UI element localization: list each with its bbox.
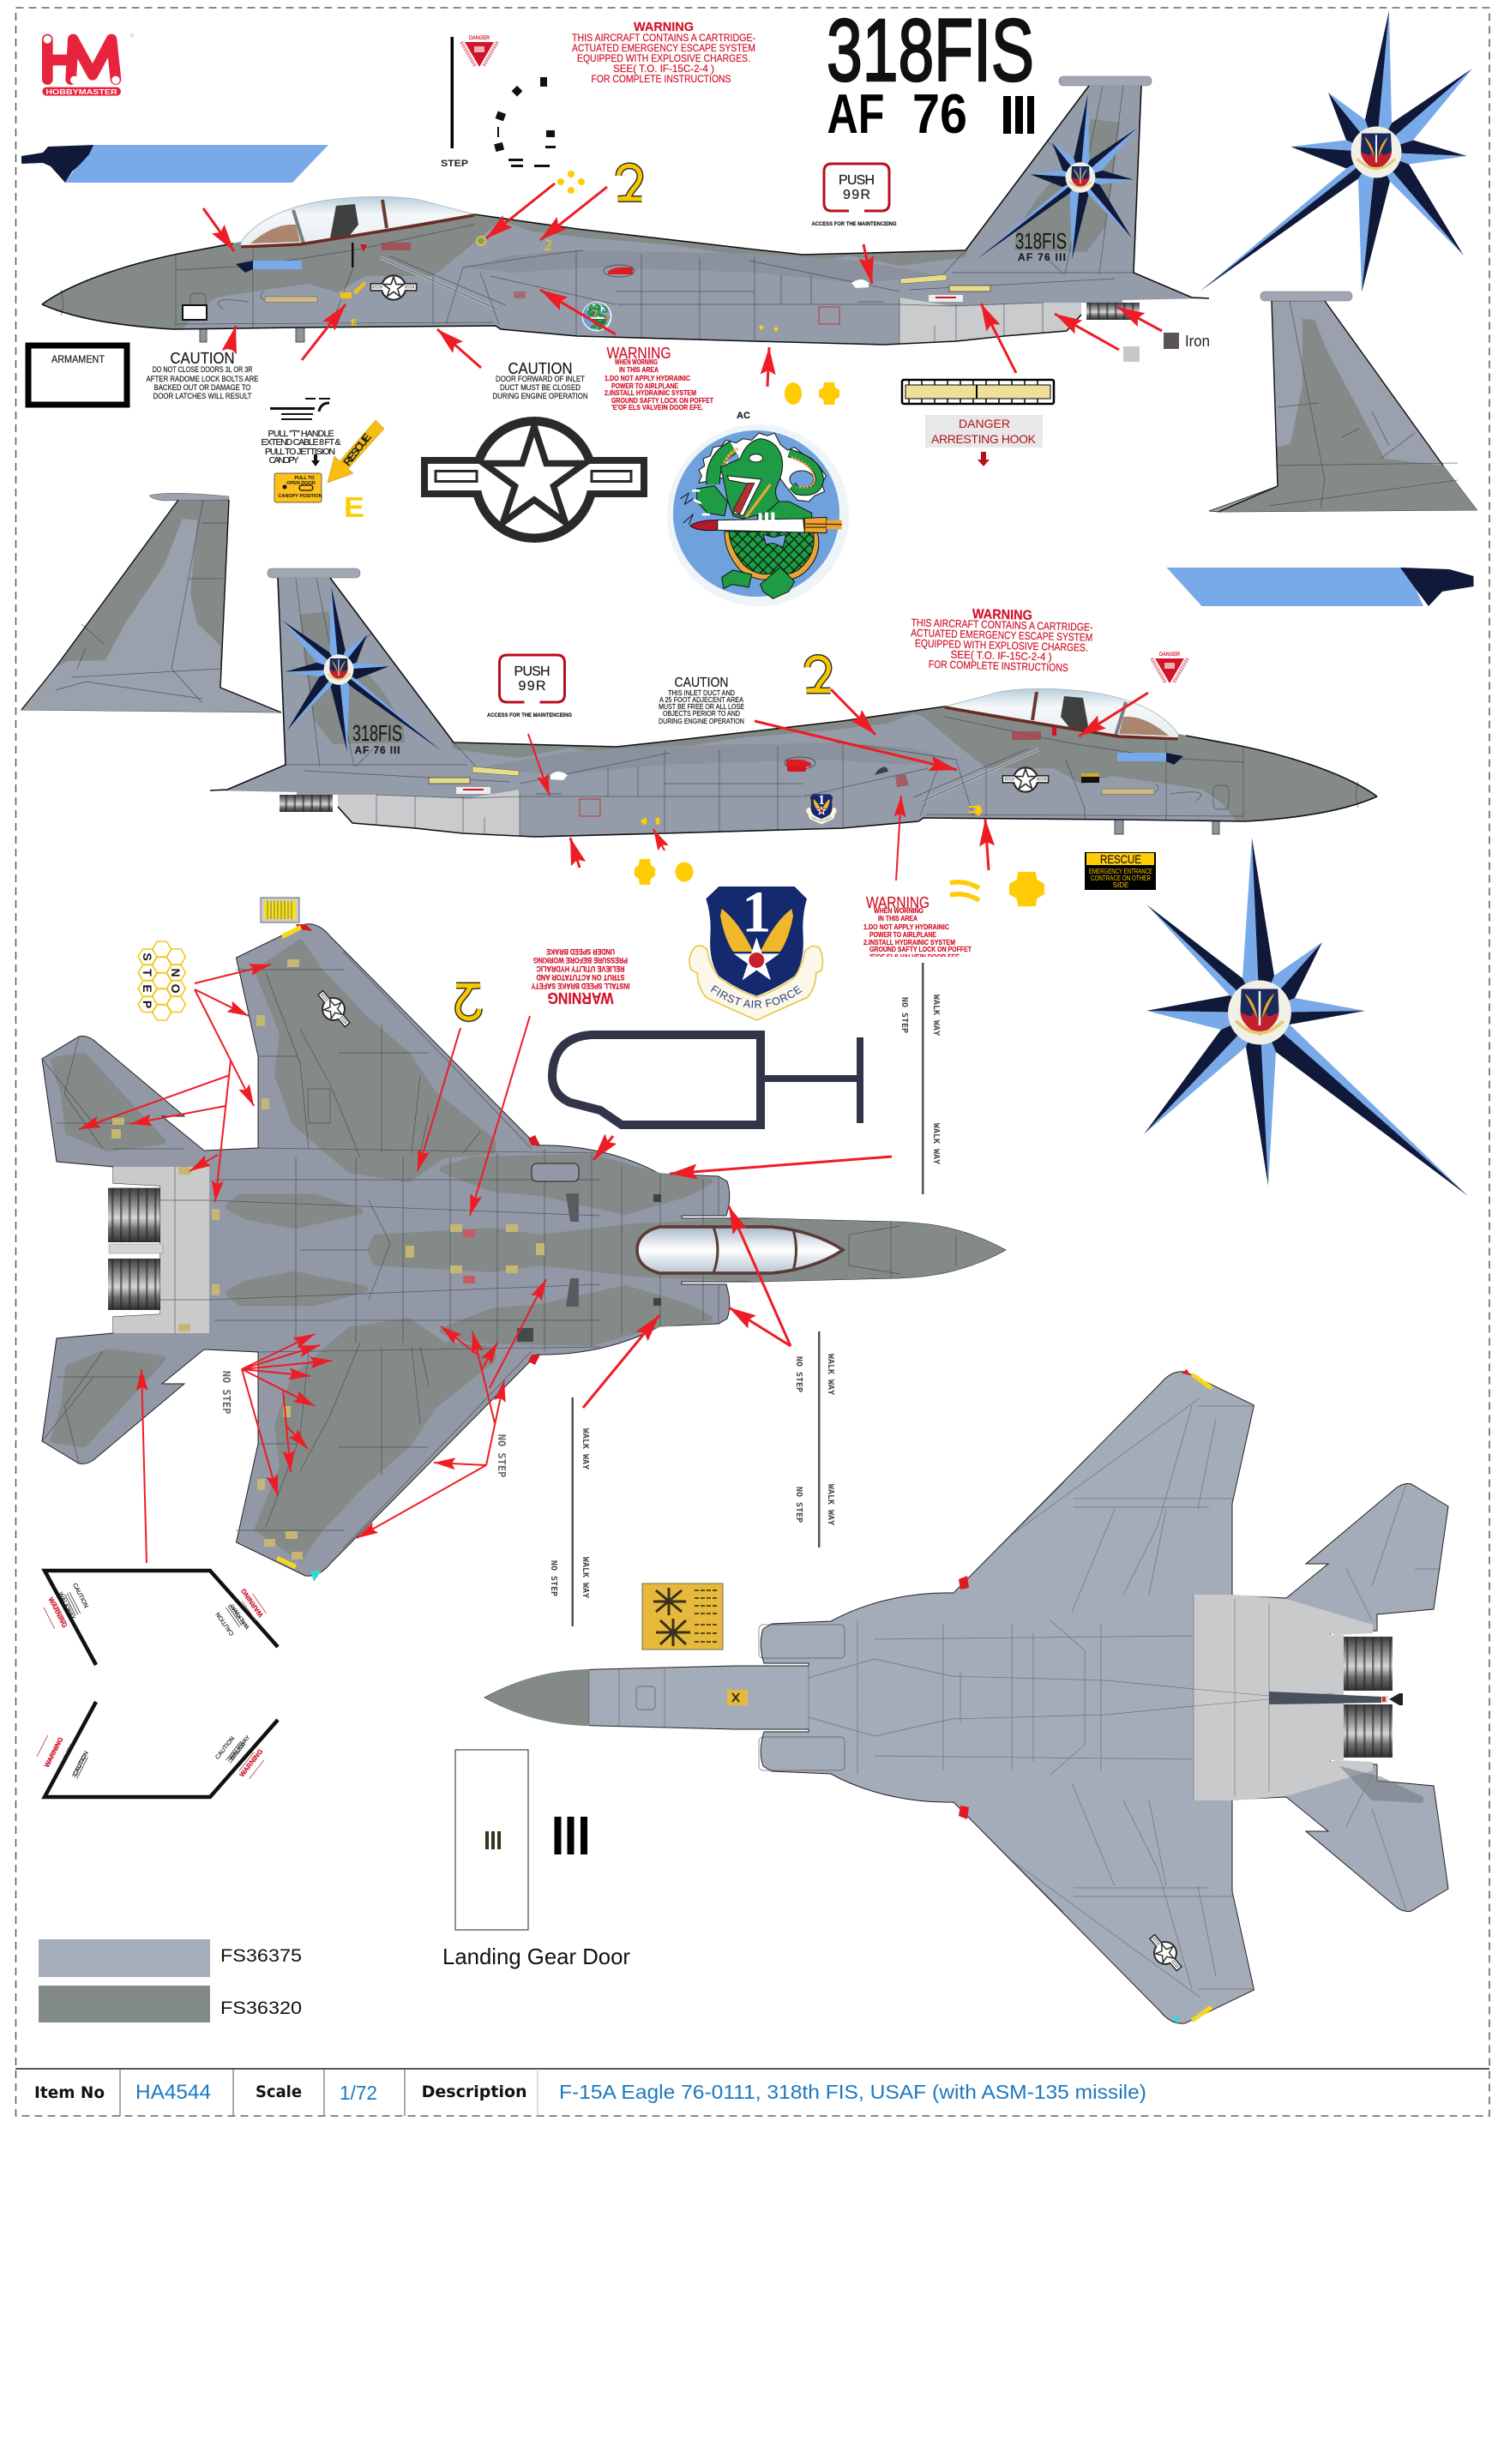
paint chips iron and light grey	[1123, 333, 1210, 362]
upper side view aircraft	[34, 76, 1209, 345]
warning text hydraulic 1: GROUND SAFTY LOCK ON POFFET	[611, 396, 714, 405]
danger arresting hook placard: ARRESTING HOOK	[931, 432, 1037, 446]
warning text hydraulic 2: 'E'OF ELS VALVEIN DOOR EFE.	[869, 953, 961, 961]
yellow rescue arrow: RESCUE	[340, 430, 374, 468]
walkway markings: WALK WAY	[826, 1484, 835, 1525]
armament box: ARMAMENT	[51, 353, 105, 365]
warning text hydraulic 2: POWER TO AIRLPLANE	[869, 930, 936, 939]
fuselage stripe decal right	[1166, 568, 1473, 606]
walkway markings: WALK WAY	[826, 1354, 835, 1395]
caution text door: DURING ENGINE OPERATION	[492, 392, 588, 401]
yellow canopy door placard: OPEN DOOR	[286, 481, 316, 486]
logo: Hobby Master	[42, 33, 135, 96]
walkway markings	[220, 963, 941, 1626]
caution inlet duct: A 25 FOOT ADJECENT AREA	[659, 695, 743, 704]
squadron dragon badge: AC	[737, 411, 750, 421]
tail number AF 76 III: AF	[827, 82, 885, 145]
caution inlet duct	[659, 676, 744, 725]
upside-down warning speed brake	[532, 947, 629, 1007]
aircraft 1 decals: 318FIS	[1015, 228, 1067, 254]
aircraft 2 decals: 318FIS	[352, 720, 402, 746]
walkway markings: NO STEP	[496, 1434, 508, 1477]
warning text hydraulic 1: 'E'OF ELS VALVEIN DOOR EFE.	[611, 403, 703, 412]
aircraft 2 decals: AF 76 III	[355, 744, 400, 756]
description: Description	[422, 2082, 527, 2101]
rescue black placard: SIDE	[1113, 881, 1128, 889]
rescue black placard	[1085, 852, 1156, 890]
black frame walkway decal upper: WALKWAY	[57, 1591, 75, 1621]
logo: Hobby Master: R	[130, 33, 135, 39]
tail number AF 76 III: 76	[912, 82, 967, 145]
walkway markings: WALK WAY	[581, 1557, 590, 1598]
black frame walkway decal upper: WARNING	[239, 1587, 265, 1619]
warning text: escape system	[572, 20, 755, 85]
yellow vent decal	[261, 898, 299, 922]
yellow canopy door placard: PULL TO	[294, 476, 315, 481]
yellow rescue arrow	[328, 420, 384, 483]
standalone fin left	[21, 493, 281, 712]
danger arresting hook placard	[925, 415, 1043, 466]
black frame walkway decal upper: CAUTION	[215, 1611, 236, 1637]
honeycomb no step decal	[138, 941, 185, 1020]
colour swatch FS36375	[39, 1939, 302, 1977]
warning text hydraulic 2	[857, 894, 972, 962]
aircraft 1 decals	[183, 228, 1067, 331]
yellow marker circle and cross	[785, 382, 839, 405]
upside-down warning speed brake: PRESSURE BEFORE WORKING	[533, 956, 628, 965]
pull T handle instructions: EXTEND CABLE 8 FT &	[261, 437, 341, 448]
push 99R placard: 99R	[843, 188, 870, 202]
warning text: escape system: EQUIPPED WITH EXPLOSIVE CHARGES.	[577, 52, 750, 64]
pull T handle instructions: PULL TO JETTISION	[265, 447, 335, 457]
squadron dragon badge	[667, 411, 849, 606]
warning text hydraulic 1: 1.DO NOT APPLY HYDRAINIC	[605, 374, 690, 382]
honeycomb no step decal: P	[141, 1001, 154, 1008]
logo: Hobby Master: HOBBYMASTER	[45, 87, 118, 96]
yellow hook numeral 2 second	[806, 658, 830, 691]
top view arrows	[79, 965, 892, 1563]
caution inlet duct: CAUTION	[674, 676, 729, 690]
landing gear door label: Landing Gear Door	[442, 1944, 630, 1969]
walkway markings: WALK WAY	[581, 1428, 590, 1469]
warning text hydraulic 1: WARNING	[607, 345, 671, 362]
honeycomb no step decal: O	[169, 984, 183, 994]
warning text hydraulic 2: WARNING	[866, 894, 929, 911]
warning text: escape system 2	[910, 605, 1093, 675]
warning text hydraulic 1: WHEN WORNING	[615, 358, 658, 366]
black frame walkway decal lower: WARNING	[43, 1736, 65, 1769]
warning text: escape system 2: SEE( T.O. IF-15C-2-4 )	[950, 648, 1052, 664]
tail number strokes III	[554, 1817, 587, 1854]
walkway markings: WALK WAY	[931, 1123, 941, 1164]
top view beige stencils	[111, 959, 544, 1560]
lower side view aircraft (mirrored)	[210, 568, 1385, 837]
upside-down warning speed brake: STRUT ON ACTUTATOR AND	[536, 973, 624, 982]
aircraft 1 decals: AF 76 III	[1018, 251, 1066, 263]
honeycomb no step decal: T	[141, 969, 154, 977]
black frame walkway decal upper: WALKWAY	[229, 1602, 251, 1630]
aircraft 2 decals	[352, 720, 1099, 825]
warning text hydraulic 1: IN THIS AREA	[619, 365, 659, 374]
warning text: escape system 2: WARNING	[972, 607, 1032, 623]
top view aircraft camouflage	[42, 924, 1006, 1582]
star insignia lower right	[1144, 838, 1468, 1196]
warning text hydraulic 2: WHEN WORNING	[874, 906, 923, 915]
yellow marks	[635, 859, 1044, 906]
paint chips iron and light grey: Iron	[1185, 333, 1210, 350]
warning text: escape system: THIS AIRCRAFT CONTAINS A CARTRIDGE-	[572, 32, 755, 44]
caution text radome: AFTER RADOME LOCK BOLTS ARE	[146, 375, 259, 384]
black frame walkway decal upper	[44, 1571, 278, 1665]
upside-down warning speed brake: RELIEVE UTILITY HYDRALIC	[536, 965, 624, 973]
pull T handle instructions: PULL "T" HANDLE	[268, 429, 334, 439]
top view red markings and roundel	[310, 985, 475, 1283]
standalone fin right	[1209, 291, 1477, 512]
yellow ejection seat stencil decal	[642, 1584, 723, 1650]
caution text door: CAUTION	[508, 360, 573, 377]
caution text door: DUCT MUST BE CLOSED	[500, 383, 581, 393]
caution text radome: DO NOT CLOSE DOORS 3L OR 3R	[153, 365, 253, 375]
armament box	[28, 346, 127, 405]
honeycomb no step decal: S	[141, 953, 154, 961]
fuselage stripe decal left	[21, 145, 328, 183]
warning text hydraulic 1: POWER TO AIRLPLANE	[611, 382, 678, 390]
black dashes stencil arc	[494, 77, 556, 167]
push 99R placard 2	[487, 655, 572, 718]
rescue black placard: CONTRACE ON OTHER	[1091, 874, 1151, 882]
speed brake outline	[552, 1035, 860, 1125]
caution inlet duct: THIS INLET DUCT AND	[668, 688, 735, 697]
warning text hydraulic 1: 2.INSTALL HYDRAINIC SYSTEM	[605, 388, 696, 397]
caution text radome: CAUTION	[170, 350, 235, 367]
danger triangle decal 2	[1152, 652, 1188, 683]
rescue black placard: RESCUE	[1100, 852, 1141, 866]
tail code 318FIS: 318FIS	[827, 1, 1034, 99]
arresting hook stripe decal	[902, 380, 1054, 404]
top view canopy	[637, 1227, 843, 1273]
walkway markings: NO STEP	[794, 1487, 803, 1523]
upside-down warning speed brake: WARNING	[547, 989, 614, 1007]
First Air Force shield	[689, 880, 822, 1020]
pull T handle instructions	[261, 398, 341, 466]
warning text hydraulic 2: GROUND SAFTY LOCK ON POFFET	[869, 945, 972, 953]
yellow canopy door placard	[274, 473, 322, 502]
danger arresting hook placard: DANGER	[959, 417, 1010, 430]
caution text radome: DOOR LATCHES WILL RESULT	[153, 392, 252, 401]
warning text: escape system 2: FOR COMPLETE INSTRUCTIONS	[929, 658, 1068, 674]
caution inlet duct: DURING ENGINE OPERATION	[659, 717, 744, 725]
colour swatch FS36320: FS36320	[220, 1998, 302, 2018]
black frame walkway decal lower: WARNING	[238, 1747, 264, 1778]
scale: Scale	[256, 2082, 302, 2101]
item number: Item No	[34, 2083, 105, 2102]
black frame walkway decal lower: CAUTION	[72, 1751, 90, 1777]
description: F-15A Eagle 76-0111, 318th FIS, USAF (with ASM-135 missile)	[559, 2081, 1146, 2103]
warning text hydraulic 1	[605, 345, 714, 412]
warning text hydraulic 2: 2.INSTALL HYDRAINIC SYSTEM	[863, 938, 955, 947]
yellow E: E	[344, 491, 364, 523]
push 99R placard: ACCESS FOR THE MAINTENCEING	[811, 221, 897, 227]
walkway markings: NO STEP	[549, 1560, 558, 1596]
walkway markings: WALK WAY	[931, 995, 941, 1036]
step marking line and label: STEP	[441, 159, 468, 169]
scale	[256, 2082, 377, 2104]
caution inlet duct: MUST BE FREE OR ALL LOSE	[659, 702, 744, 711]
honeycomb no step decal: N	[169, 968, 183, 977]
scale: 1/72	[340, 2082, 377, 2104]
upside-down warning speed brake: UNDER SPEED BRAKE	[546, 947, 615, 956]
underside view aircraft	[484, 1369, 1448, 2023]
caution text radome: BACKED OUT OR DAMAGE TO	[154, 383, 250, 393]
black frame walkway decal upper: CAUTION	[71, 1583, 89, 1609]
landing gear door panel	[455, 1750, 528, 1930]
pull T handle instructions: CANOPY	[269, 455, 298, 466]
warning text hydraulic 2: 1.DO NOT APPLY HYDRAINIC	[863, 922, 949, 931]
black frame walkway decal lower	[37, 1702, 278, 1797]
yellow canopy door placard: CANOPY POSITION	[278, 494, 322, 499]
warning text: escape system 2: THIS AIRCRAFT CONTAINS A CARTRIDGE-	[911, 616, 1093, 634]
tail number AF 76 III	[827, 82, 1034, 145]
colour swatch FS36320	[39, 1986, 302, 2022]
warning text: escape system: FOR COMPLETE INSTRUCTIONS	[592, 73, 731, 85]
rescue black placard: EMERGENCY ENTRANCE	[1089, 868, 1152, 875]
colour swatch FS36375: FS36375	[220, 1946, 302, 1966]
danger triangle decal 2: DANGER	[1159, 652, 1180, 658]
item number: HA4544	[135, 2081, 211, 2104]
item number	[34, 2081, 211, 2104]
upside-down warning speed brake: INSTALL SPEED BRAKE SAFETY	[532, 982, 629, 990]
push 99R placard: PUSH	[839, 173, 875, 188]
push 99R placard	[811, 164, 897, 227]
walkway markings: NO STEP	[899, 997, 909, 1033]
national insignia roundel	[421, 417, 647, 543]
warning text: escape system: ACTUATED EMERGENCY ESCAPE SYSTEM	[572, 42, 755, 54]
walkway markings: NO STEP	[794, 1356, 803, 1392]
warning text: escape system: SEE( T.O. IF-15C-2-4 )	[613, 63, 714, 75]
caution inlet duct: OBJECTS PERIOR TO AND	[663, 709, 740, 718]
arrows aircraft 1	[203, 183, 1162, 387]
warning text: escape system: WARNING	[634, 20, 694, 34]
caution text door: DOOR FORWARD OF INLET	[496, 375, 585, 384]
step marking line and label	[441, 37, 468, 169]
black frame walkway decal lower: WALKWAY	[57, 1744, 75, 1773]
warning text: escape system 2: ACTUATED EMERGENCY ESCAPE SYSTEM	[911, 627, 1092, 644]
black frame walkway decal lower: WALKWAY	[228, 1734, 251, 1762]
danger triangle decal: DANGER	[469, 35, 490, 41]
warning text hydraulic 2: IN THIS AREA	[878, 914, 917, 922]
danger triangle decal	[461, 35, 497, 67]
walkway markings: NO STEP	[220, 1371, 232, 1414]
caution text radome	[146, 350, 259, 401]
upside-down hook numeral	[456, 986, 480, 1019]
specification table	[15, 2068, 1489, 2116]
yellow hook numeral 2	[617, 165, 641, 199]
star insignia top right	[1200, 10, 1472, 292]
yellow dots	[557, 171, 585, 194]
warning text: escape system 2: EQUIPPED WITH EXPLOSIVE CHARGES.	[915, 637, 1088, 654]
black frame walkway decal lower: CAUTION	[214, 1736, 236, 1761]
aircraft 1 decals: E	[351, 318, 358, 328]
honeycomb no step decal: E	[141, 984, 154, 993]
arrows aircraft 2	[528, 689, 1148, 880]
black frame walkway decal upper: WARNING	[46, 1596, 69, 1629]
caution text door	[492, 360, 588, 401]
